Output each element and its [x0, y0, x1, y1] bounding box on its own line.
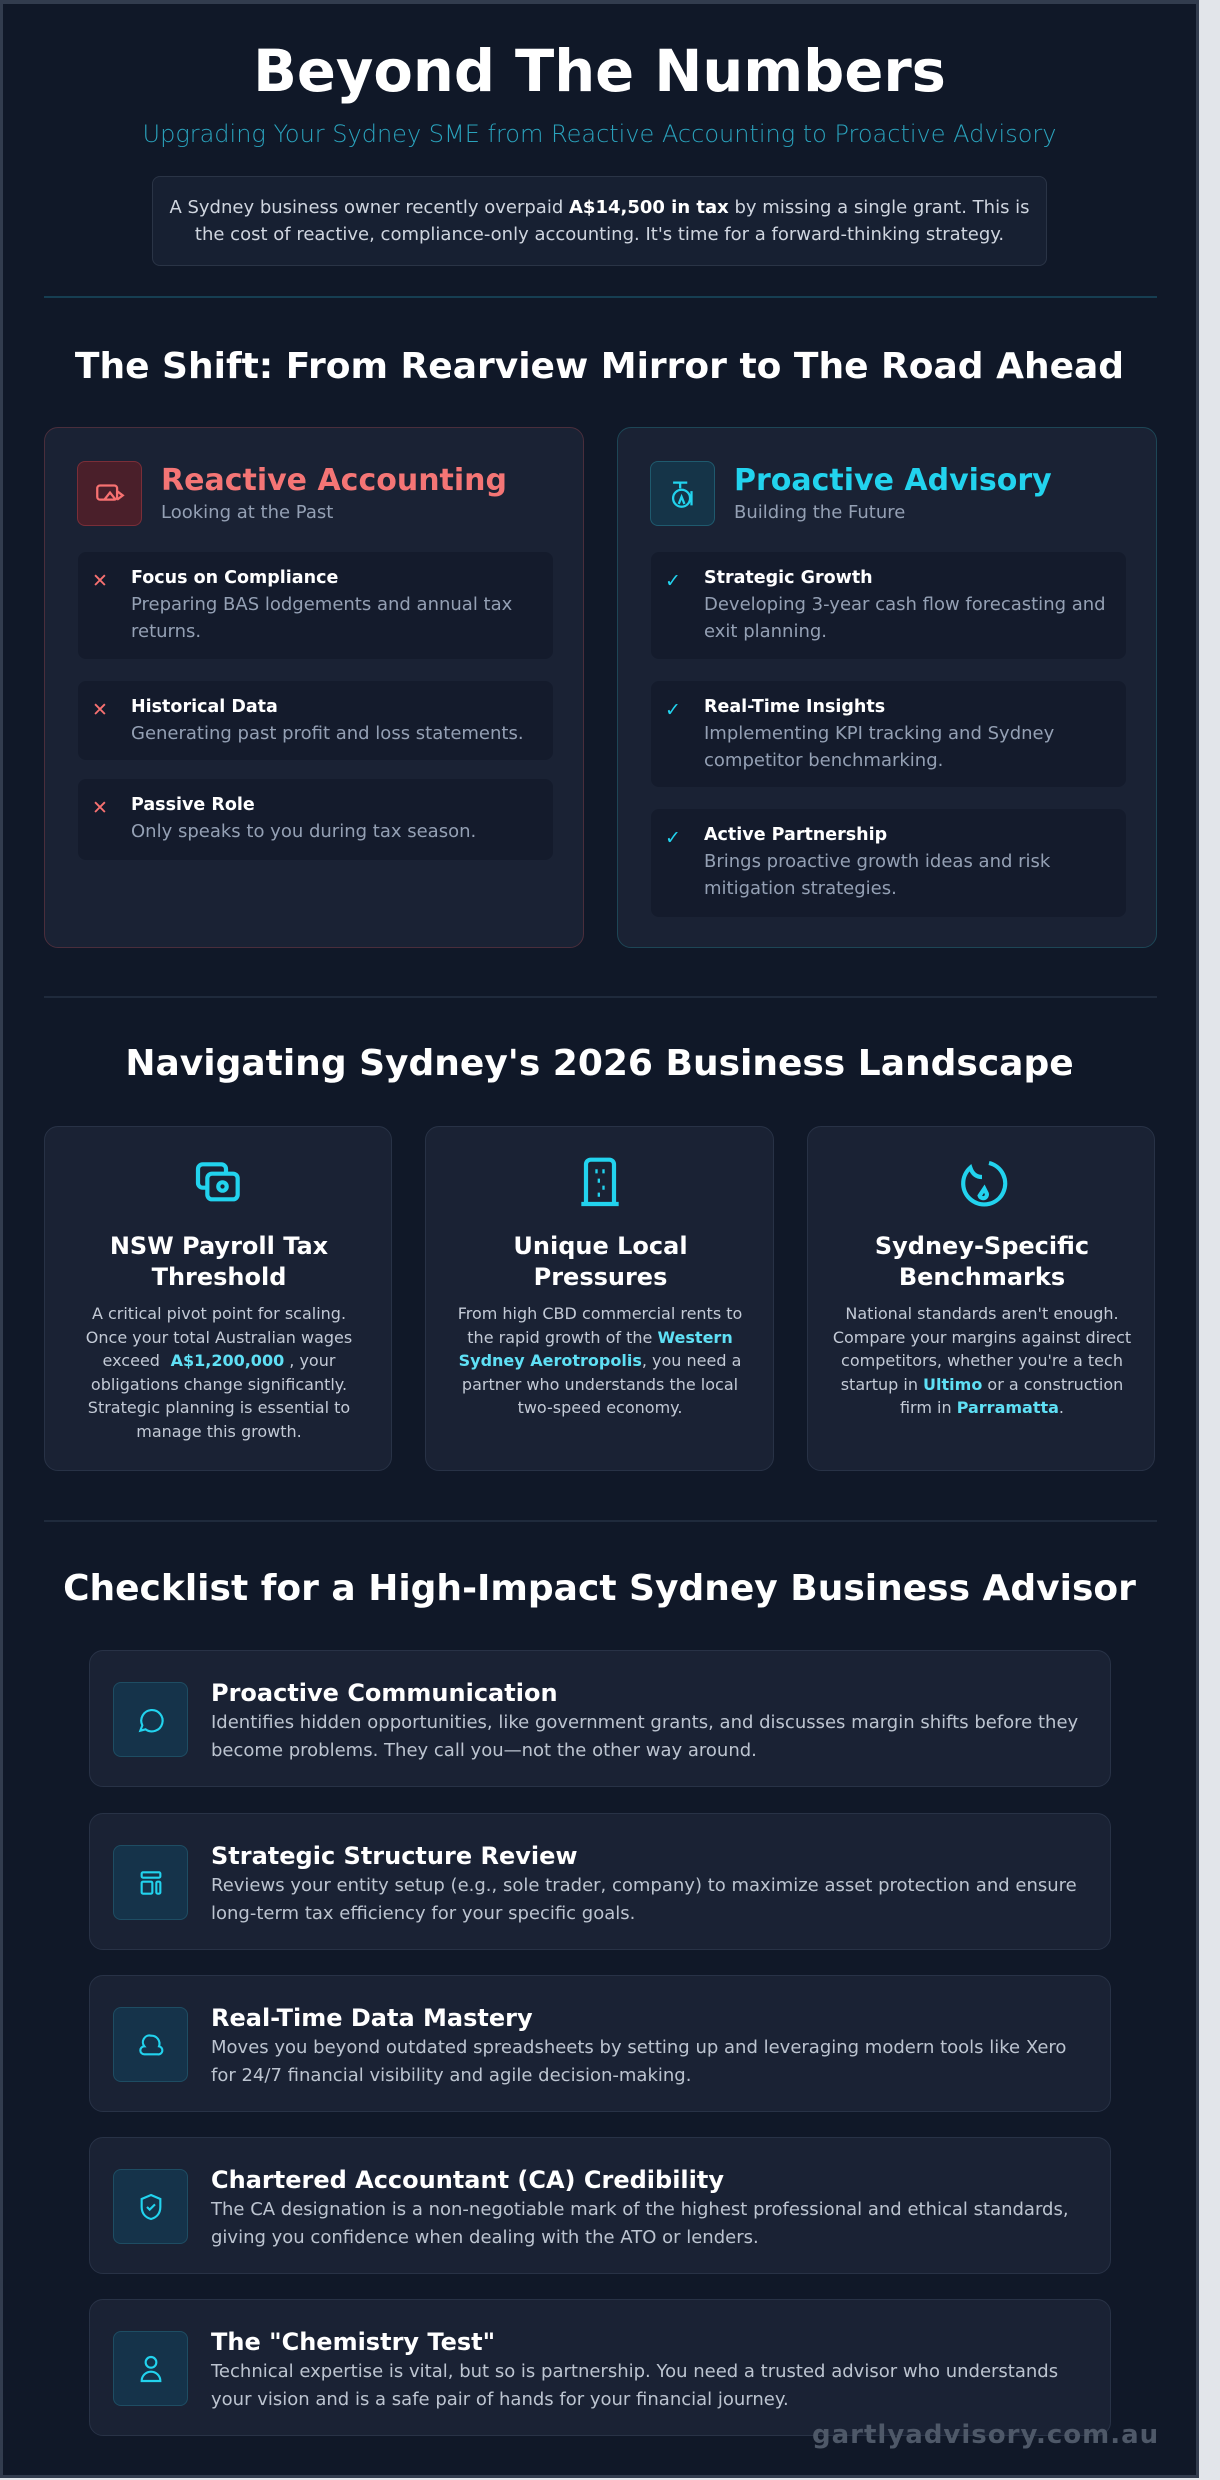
intro callout: [152, 176, 1047, 266]
item: active partnership: [651, 809, 1126, 917]
panel: benchmarks: [807, 1126, 1155, 1471]
checklist: communication: Identifies hidden opportunities, like government grants, and discusses margin shifts before they become problems. They call you—not the other way around.: [211, 1712, 1078, 1761]
checklist: structure: Reviews your entity setup (e.g., sole trader, company) to maximize asset protection and ensure long-term tax efficiency for your specific goals.: [211, 1875, 1077, 1924]
checklist: communication: [89, 1650, 1111, 1787]
intro callout: A Sydney business owner recently overpaid A$14,500 in tax by missing a single grant. This is the cost of reactive, compliance-only accounting. It's time for a forward-thinking strategy.: [169, 197, 1030, 245]
checklist: chemistry: Technical expertise is vital, but so is partnership. You need a trusted advisor who understands your vision and is a safe pair of hands for your financial journey.: [211, 2361, 1058, 2410]
item: strategic growth: [651, 552, 1126, 659]
item: real-time insights: Implementing KPI tracking and Sydney competitor benchmarking.: [704, 723, 1054, 771]
panel: proactive advisory: [617, 427, 1157, 948]
item: active partnership: Active Partnership: [704, 825, 887, 845]
item: passive: Only speaks to you during tax season.: [131, 821, 476, 842]
icon: building: [581, 1158, 619, 1206]
item: compliance: Preparing BAS lodgements and annual tax returns.: [131, 594, 512, 642]
icon: layout: [113, 1845, 188, 1920]
panel: payroll tax: Threshold: [152, 1263, 286, 1291]
checklist: CA: The CA designation is a non-negotiable mark of the highest professional and ethical standards, giving you confidence when dealing with the ATO or lenders.: [211, 2199, 1069, 2248]
item: real-time insights: Real-Time Insights: [704, 697, 885, 717]
item: historical: Generating past profit and loss statements.: [131, 723, 524, 744]
panel: local pressures: Pressures: [534, 1263, 667, 1291]
item: compliance: ✕: [92, 570, 108, 592]
panel: benchmarks: Benchmarks: [899, 1263, 1065, 1291]
item: historical: ✕: [92, 699, 108, 721]
checklist: CA: Chartered Accountant (CA) Credibility: [211, 2166, 724, 2194]
item: passive: [78, 779, 553, 860]
panel: proactive advisory: Building the Future: [734, 502, 905, 523]
panel: local pressures: From high CBD commercial rents to the rapid growth of the Western Sydney Aerotropolis, you need a partner who understands the local two-speed economy.: [458, 1304, 742, 1417]
panel: payroll tax: NSW Payroll Tax: [110, 1232, 328, 1260]
item: historical: [78, 681, 553, 760]
panel: payroll tax: [44, 1126, 392, 1471]
heading: landscape: Navigating Sydney's 2026 Business Landscape: [125, 1043, 1074, 1084]
icon: proactive: [650, 461, 715, 526]
checklist: chemistry: [89, 2299, 1111, 2436]
item: real-time insights: ✓: [665, 699, 681, 721]
icon: person: [113, 2331, 188, 2406]
panel: payroll tax: A critical pivot point for scaling. Once your total Australian wages exceed A$1,200,000 , your obligations change significantly. Strategic planning is essential to manage this growth.: [86, 1304, 352, 1440]
item: passive: ✕: [92, 797, 108, 819]
icon: money: [196, 1162, 240, 1202]
heading: checklist: Checklist for a High-Impact Sydney Business Advisor: [63, 1568, 1136, 1609]
panel: benchmarks: Sydney-Specific: [875, 1232, 1089, 1260]
heading: proactive: Proactive Advisory: [734, 463, 1052, 498]
item: strategic growth: Strategic Growth: [704, 568, 873, 588]
item: passive: Passive Role: [131, 795, 255, 815]
checklist: CA: [89, 2137, 1111, 2274]
heading: reactive: Reactive Accounting: [161, 463, 507, 498]
item: active partnership: Brings proactive growth ideas and risk mitigation strategies.: [704, 851, 1050, 899]
panel: local pressures: [425, 1126, 774, 1471]
item: compliance: Focus on Compliance: [131, 568, 338, 588]
icon: reactive: [77, 461, 142, 526]
icon: chat: [113, 1682, 188, 1757]
item: strategic growth: ✓: [665, 570, 681, 592]
panel: local pressures: Unique Local: [513, 1232, 688, 1260]
panel: benchmarks: National standards aren't enough. Compare your margins against direct competitors, whether you're a tech startup in Ultimo or a construction firm in Parramatta.: [833, 1304, 1131, 1417]
icon: shield: [113, 2169, 188, 2244]
icon: globe: [961, 1161, 1008, 1206]
heading: the shift: The Shift: From Rearview Mirror to The Road Ahead: [75, 346, 1124, 387]
checklist: structure: [89, 1813, 1111, 1950]
panel: reactive accounting: [44, 427, 584, 948]
checklist: data: [89, 1975, 1111, 2112]
checklist: chemistry: The "Chemistry Test": [211, 2328, 495, 2356]
panel: reactive accounting: Looking at the Past: [161, 502, 333, 523]
item: compliance: [78, 552, 553, 659]
icon: cloud: [113, 2007, 188, 2082]
item: strategic growth: Developing 3-year cash flow forecasting and exit planning.: [704, 594, 1106, 642]
item: historical: Historical Data: [131, 697, 278, 717]
subtitle: Upgrading Your Sydney SME from Reactive Accounting to Proactive Advisory: [143, 120, 1056, 148]
title: Beyond The Numbers: [253, 38, 946, 105]
checklist: data: Moves you beyond outdated spreadsheets by setting up and leveraging modern tools like Xero for 24/7 financial visibility and agile decision-making.: [211, 2037, 1066, 2086]
item: real-time insights: [651, 681, 1126, 787]
checklist: structure: Strategic Structure Review: [211, 1842, 578, 1870]
checklist: communication: Proactive Communication: [211, 1679, 558, 1707]
watermark: gartlyadvisory.com.au: [812, 2420, 1159, 2450]
checklist: data: Real-Time Data Mastery: [211, 2004, 533, 2032]
item: active partnership: ✓: [665, 827, 681, 849]
